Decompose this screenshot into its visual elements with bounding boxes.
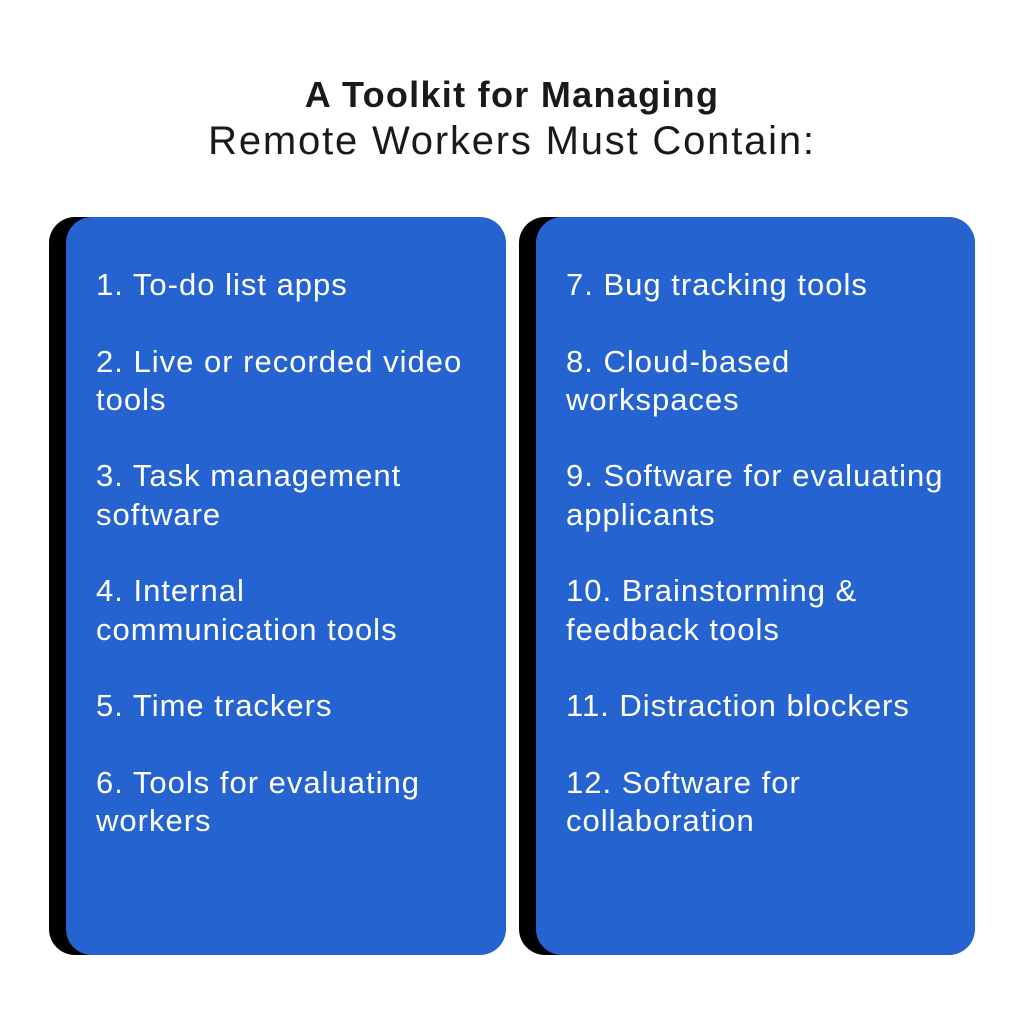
panel: right list: 12. Software for [566,765,801,800]
panel: left list: 2. Live or recorded video [96,344,462,379]
panel: left list: tools [96,382,166,417]
panel: left list: 3. Task management [96,458,401,493]
panel: left list: 1. To-do list apps [96,267,348,302]
panel: right list [536,217,975,955]
panel: right list: 10. Brainstorming & [566,573,857,608]
panel: left list: workers [96,803,212,838]
panel shadow: left [49,217,489,955]
panel: right list: workspaces [566,382,740,417]
panel: left list: software [96,497,221,532]
panel: left list: 4. Internal [96,573,245,608]
panel: left list [66,217,506,955]
panel shadow: right [519,217,959,955]
panel: left list: 5. Time trackers [96,688,332,723]
panel: right list: applicants [566,497,716,532]
panel: right list: 7. Bug tracking tools [566,267,868,302]
title: A Toolkit for Managing [305,74,719,115]
panel: right list: 11. Distraction blockers [566,688,910,723]
panel: right list: collaboration [566,803,755,838]
panel: right list: 8. Cloud-based [566,344,790,379]
panel: right list: 9. Software for evaluating [566,458,944,493]
panel: right list: feedback tools [566,612,780,647]
subtitle: Remote Workers Must Contain: [208,119,816,163]
panel: left list: 6. Tools for evaluating [96,765,420,800]
panel: left list: communication tools [96,612,398,647]
